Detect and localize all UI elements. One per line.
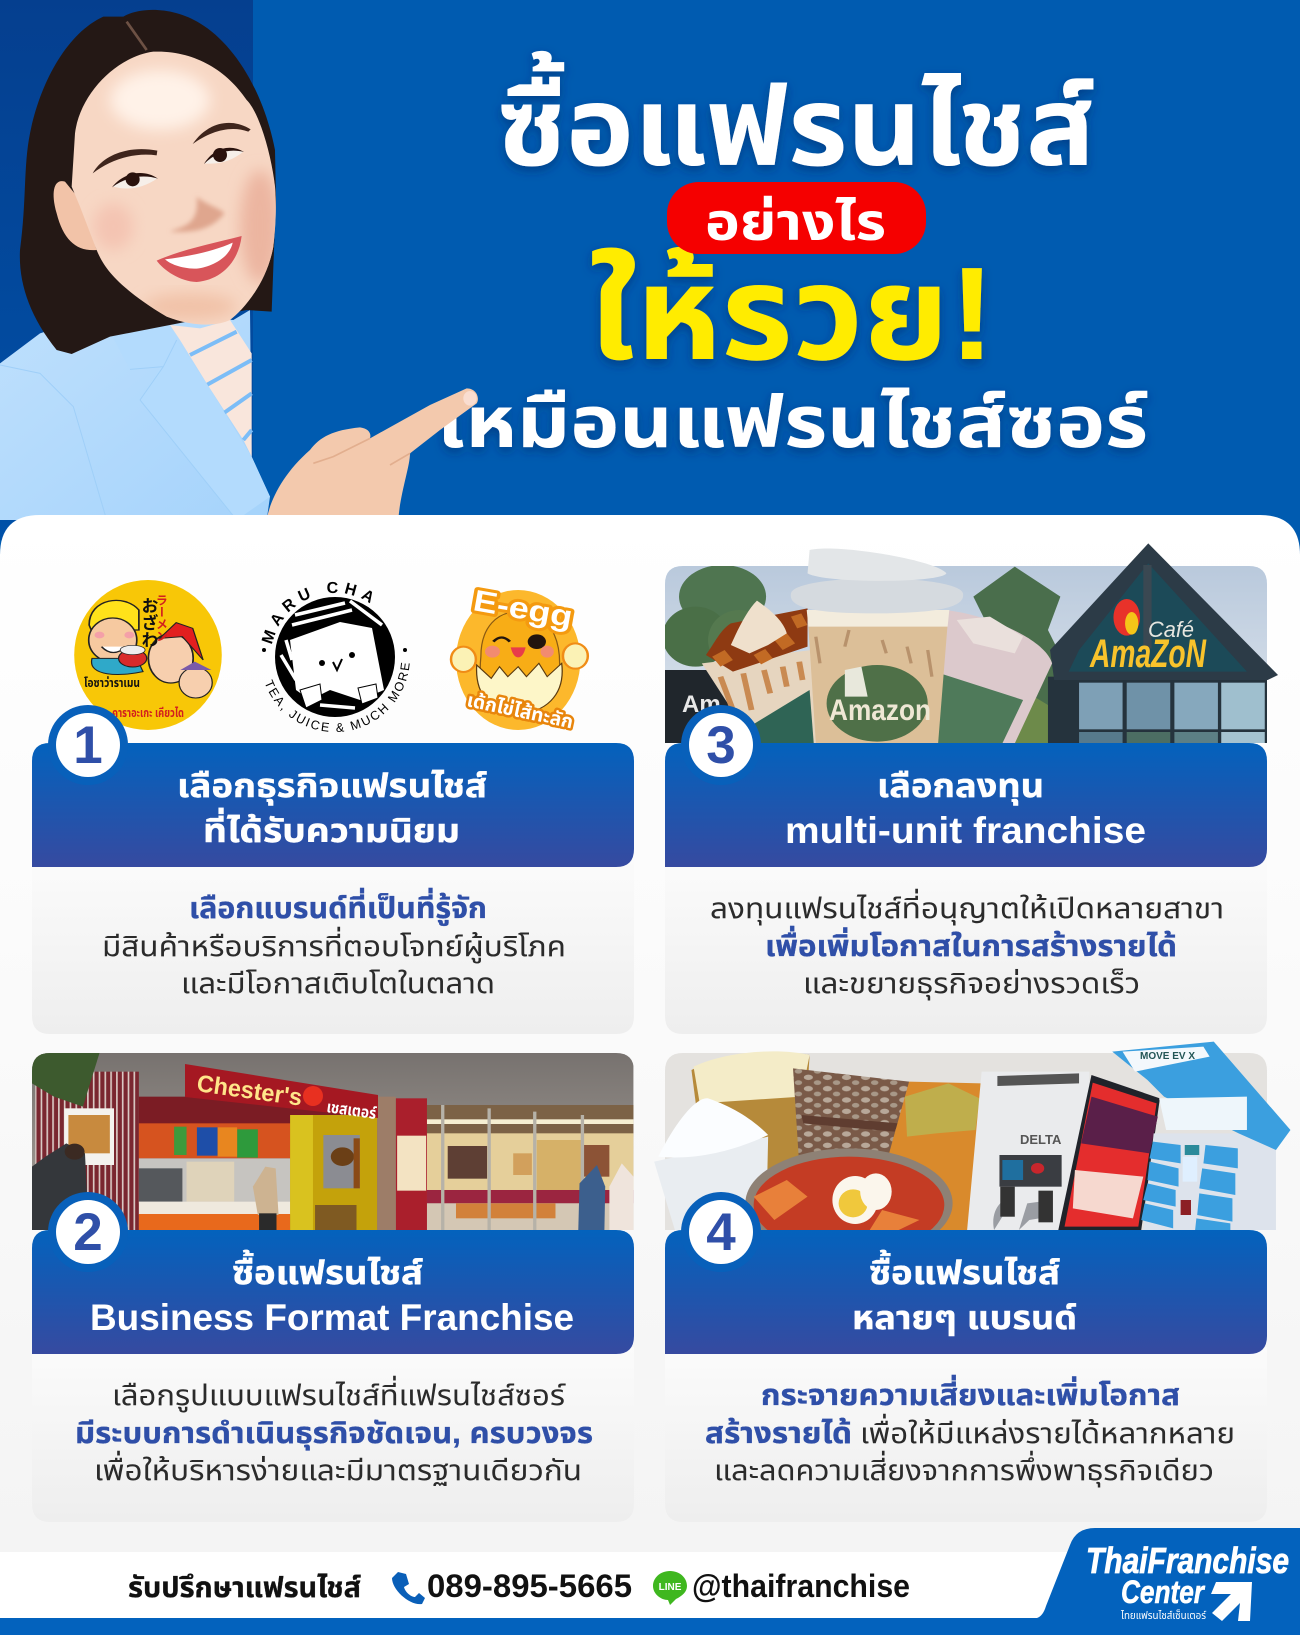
sign text: เชสเตอร์ xyxy=(325,1099,377,1123)
MOVE EV label: MOVE EV X xyxy=(1140,1051,1195,1062)
white content panel xyxy=(0,515,1300,1552)
body text: เพื่อให้มีแหล่งรายได้หลากหลาย xyxy=(860,1413,1235,1450)
number badge: 2 xyxy=(73,1203,103,1262)
heading text: Business Format Franchise xyxy=(90,1297,574,1338)
number badge: 4 xyxy=(706,1203,736,1262)
teeth xyxy=(165,243,233,269)
title line 1: ซื้อแฟรนไชส์ xyxy=(497,50,1095,189)
left cup xyxy=(702,650,816,743)
lips xyxy=(157,236,242,282)
icon: phone xyxy=(392,1572,425,1604)
brows xyxy=(93,123,251,173)
heading text: ที่ได้รับความนิยม xyxy=(203,807,460,849)
body text: และมีโอกาสเติบโตในตลาด xyxy=(181,968,495,1000)
heading text: ซื้อแฟรนไชส์ xyxy=(232,1249,423,1291)
brand logo: Ozawa ramen xyxy=(74,580,222,730)
heading text: เลือกธุรกิจแฟรนไชส์ xyxy=(177,767,487,806)
icon: LINE bubble xyxy=(653,1571,687,1605)
body text xyxy=(705,1374,1235,1487)
pill text: อย่างไร xyxy=(705,194,886,252)
hand xyxy=(267,388,478,520)
ThaiFranchise Center logo xyxy=(1037,1528,1300,1622)
eyes xyxy=(113,149,243,189)
body text: และขยายธุรกิจอย่างรวดเร็ว xyxy=(803,968,1140,1000)
body text: และลดความเสี่ยงจากการพึ่งพาธุรกิจเดียว xyxy=(714,1450,1214,1487)
sign: Cafe: Café xyxy=(1148,617,1194,642)
number badge xyxy=(681,705,761,785)
bag xyxy=(793,1068,909,1230)
Maru Cha tagline: TEA, JUICE & MUCH MORE xyxy=(266,662,410,732)
logo caption top: โอซาว่าราเมน xyxy=(84,676,140,690)
heading text: ซื้อแฟรนไชส์ xyxy=(869,1249,1060,1291)
heading text: เลือกลงทุน xyxy=(877,767,1044,806)
body text xyxy=(710,888,1224,1000)
back drink xyxy=(691,1053,810,1230)
EV locker house xyxy=(1143,1133,1276,1230)
woman pointing xyxy=(0,10,478,520)
phone number: 089-895-5665 xyxy=(427,1568,632,1604)
heading banner xyxy=(665,1230,1267,1354)
heading text xyxy=(90,1249,574,1338)
parrot xyxy=(1113,599,1140,636)
sign: Amazon: AmaZoN xyxy=(1089,632,1207,676)
brand logo: E-egg xyxy=(451,590,588,730)
hero background xyxy=(0,0,1300,560)
Maru Cha arc text: MARU CHA xyxy=(262,582,372,644)
card body xyxy=(665,860,1267,1034)
title line 3 yellow: ให้รวย! xyxy=(589,240,995,387)
panel 1: choose popular franchise xyxy=(32,580,674,1034)
nose xyxy=(170,197,225,232)
jacket xyxy=(0,293,270,520)
heading text xyxy=(785,767,1146,851)
body text: เลือกรูปแบบแฟรนไชส์ที่แฟรนไชส์ซอร์ xyxy=(112,1375,567,1413)
lapels xyxy=(100,293,270,520)
number badge: 1 xyxy=(73,716,103,775)
centre cup xyxy=(808,613,948,743)
heading text xyxy=(177,767,487,849)
body text: มีระบบการดำเนินธุรกิจชัดเจน, ครบวงจร xyxy=(75,1418,593,1450)
title line 4: เหมือนแฟรนไชส์ซอร์ xyxy=(437,383,1148,463)
whipped cup xyxy=(654,1137,768,1230)
body text: เลือกแบรนด์ที่เป็นที่รู้จัก xyxy=(189,887,487,926)
customers left xyxy=(32,1143,87,1230)
heading text xyxy=(852,1249,1077,1336)
body text: เพื่อเพิ่มโอกาสในการสร้างรายได้ xyxy=(765,925,1177,963)
E-egg wordmark: E-egg xyxy=(471,584,575,634)
brand logo: Maru Cha xyxy=(262,582,410,732)
EV charger xyxy=(967,1072,1089,1230)
card body xyxy=(665,1347,1267,1522)
logo Center: Center xyxy=(1121,1574,1205,1610)
phone xyxy=(1058,1075,1160,1230)
number badge xyxy=(48,1192,128,1272)
photo: assorted franchise products xyxy=(654,1042,1290,1230)
DELTA label: DELTA xyxy=(1020,1132,1062,1147)
body text xyxy=(75,1375,593,1487)
panel 4: multiple brands xyxy=(654,1042,1290,1522)
ear xyxy=(54,181,97,250)
body text: สร้างรายได้ xyxy=(705,1418,852,1450)
red pill xyxy=(667,182,926,254)
cup logo text: Amazon xyxy=(829,694,931,727)
heading banner xyxy=(665,743,1267,867)
dark panel behind woman xyxy=(0,0,253,540)
heading banner xyxy=(32,1230,634,1354)
icon: LINE bubble: LINE xyxy=(659,1582,682,1593)
heading text: หลายๆ แบรนด์ xyxy=(852,1299,1077,1336)
footer contact bar xyxy=(0,1552,1300,1635)
body text xyxy=(102,887,566,1000)
body text: กระจายความเสี่ยงและเพิ่มโอกาส xyxy=(761,1374,1180,1412)
hero title xyxy=(437,50,1148,463)
customer at counter xyxy=(253,1167,279,1215)
card body xyxy=(32,860,634,1034)
number badge: 3 xyxy=(706,716,736,775)
photo: Cafe Amazon xyxy=(662,543,1278,745)
right cup xyxy=(936,610,1052,743)
consult label: รับปรึกษาแฟรนไชส์ xyxy=(128,1572,361,1603)
sign band xyxy=(185,1064,378,1118)
panel 2: business format franchise xyxy=(32,1053,634,1522)
E-egg caption: เด้กไข่ไส้ทะลัก xyxy=(465,689,575,733)
number badge xyxy=(681,1192,761,1272)
body text: เพื่อให้บริหารง่ายและมีมาตรฐานเดียวกัน xyxy=(94,1450,582,1487)
roof xyxy=(1050,543,1278,680)
body text: มีสินค้าหรือบริการที่ตอบโจทย์ผู้บริโภค xyxy=(102,926,566,964)
LINE handle: @thaifranchise xyxy=(692,1568,910,1604)
hair xyxy=(20,10,276,354)
storefront letters: Am xyxy=(682,691,721,718)
logo Thai subtext: ไทยแฟรนไชส์เซ็นเตอร์ xyxy=(1120,1610,1206,1622)
number badge xyxy=(48,705,128,785)
logo Japanese name: おざわ xyxy=(138,597,162,648)
chicken tray xyxy=(886,1082,982,1230)
women right xyxy=(578,1165,605,1230)
photo: Chester's restaurant xyxy=(32,1053,633,1230)
card body xyxy=(32,1347,634,1522)
face xyxy=(72,52,280,325)
bowl xyxy=(745,1148,953,1258)
logo arrow xyxy=(1211,1582,1252,1621)
sign text xyxy=(195,1070,377,1123)
logo caption bottom: คาราอะเกะ เคียวได xyxy=(112,706,184,720)
panel 3: multi-unit franchise xyxy=(662,543,1278,1034)
striped shirt xyxy=(170,320,252,457)
heading banner xyxy=(32,743,634,867)
body text: ลงทุนแฟรนไชส์ที่อนุญาตให้เปิดหลายสาขา xyxy=(710,888,1224,925)
heading text: multi-unit franchise xyxy=(785,810,1146,851)
sign text: Chester's xyxy=(195,1070,304,1112)
bottom blue strip xyxy=(0,1618,1300,1635)
logo Japanese word: ラーメン xyxy=(154,594,170,642)
